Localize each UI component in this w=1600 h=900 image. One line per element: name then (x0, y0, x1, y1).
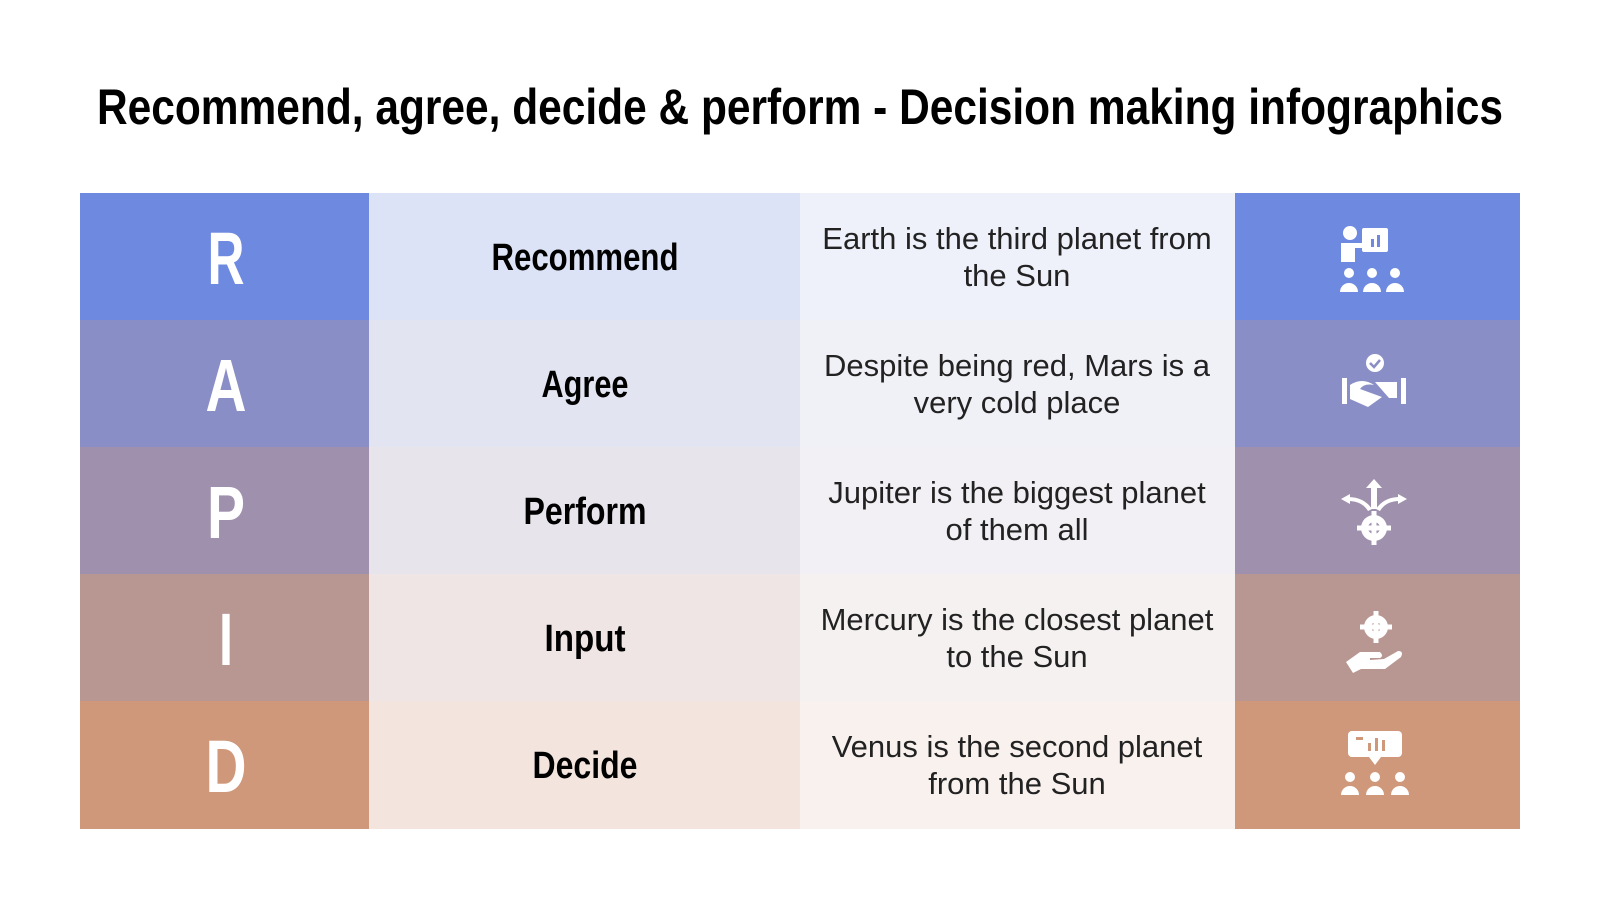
row: I: Mercury is the closest planet (821, 602, 1214, 637)
row: D: Venus is the second planet (832, 729, 1203, 764)
row: P: Perform (524, 491, 646, 533)
row: P: P (207, 471, 245, 554)
icon: hand with gear (1346, 611, 1402, 673)
table (80, 193, 1520, 829)
row: D: from the Sun (928, 766, 1106, 801)
row: D: D (206, 725, 246, 808)
row: A: A (206, 344, 246, 427)
row: A: very cold place (914, 385, 1120, 420)
row: A: Agree (542, 364, 628, 406)
icon: meeting speech (1341, 731, 1409, 795)
row: I: Input (544, 618, 626, 660)
row: R: Earth is the third planet from (822, 221, 1212, 256)
icon: presentation (1340, 226, 1404, 292)
icon: gear with arrows (1341, 479, 1407, 545)
row: A: Despite being red, Mars is a (824, 348, 1211, 383)
row: I: to the Sun (946, 639, 1088, 674)
row: I (80, 574, 1520, 701)
row: R (80, 193, 1520, 320)
row: R: R (208, 217, 244, 300)
row: I: I (219, 598, 233, 681)
row: P (80, 447, 1520, 574)
row: P: of them all (945, 512, 1089, 547)
row: R: Recommend (492, 237, 678, 279)
row: D (80, 701, 1520, 829)
icon: handshake (1342, 354, 1406, 407)
row: D: Decide (532, 745, 638, 787)
row: R: the Sun (964, 258, 1070, 293)
row: A (80, 320, 1520, 447)
row: P: Jupiter is the biggest planet (828, 475, 1206, 510)
